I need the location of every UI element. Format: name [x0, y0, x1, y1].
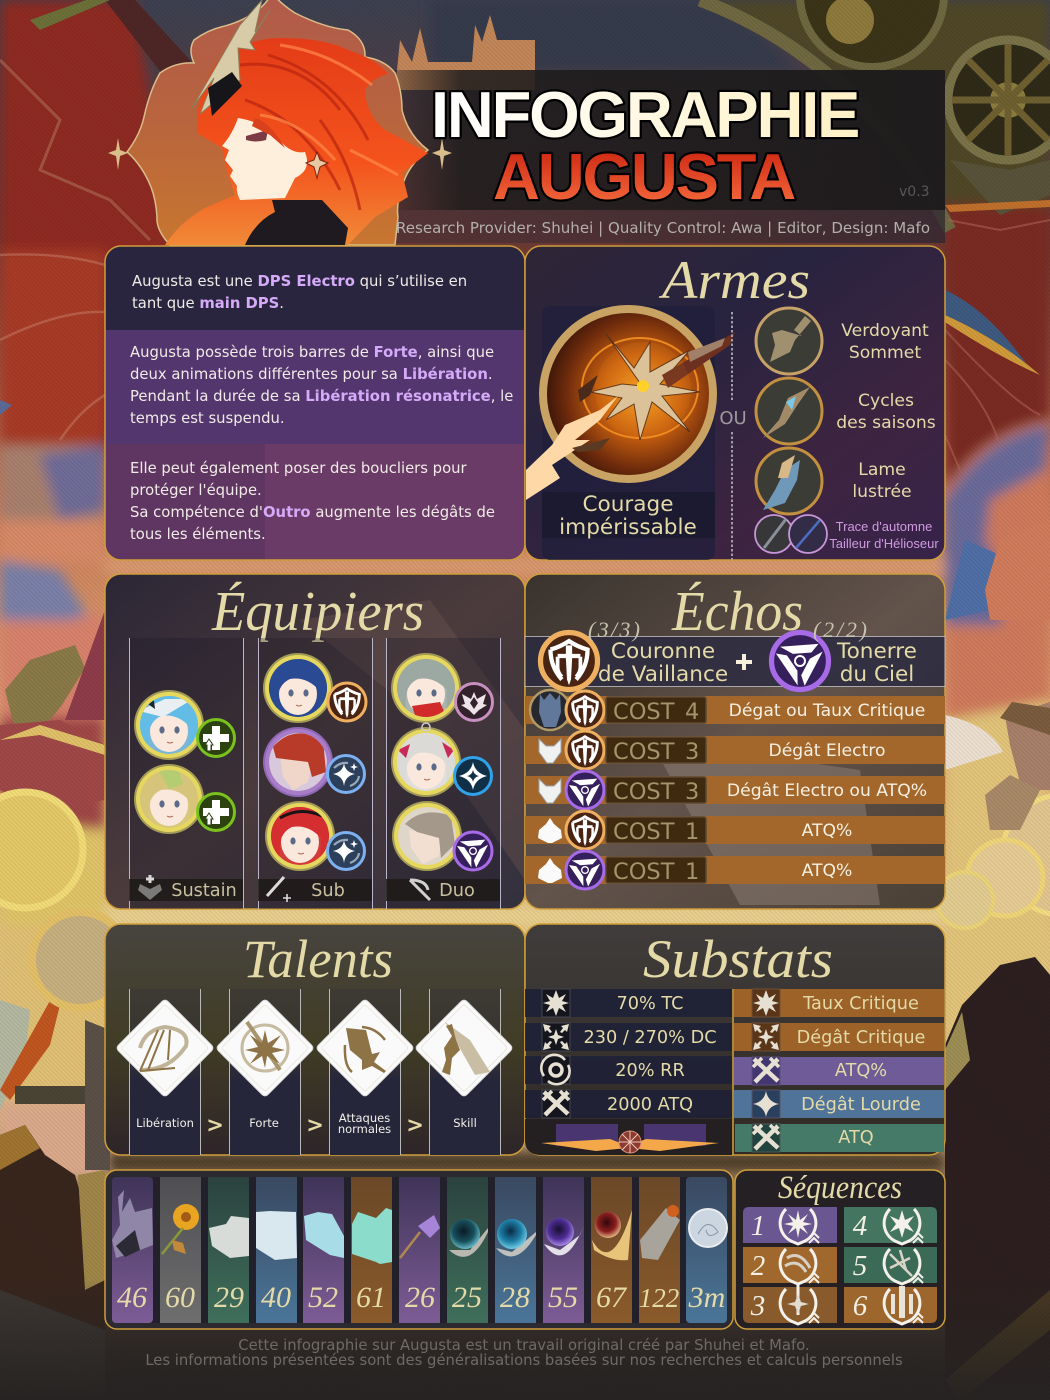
material 61: 61: [356, 1281, 386, 1314]
soldiers and shields: [5, 645, 85, 730]
echo row: cost 1 thunder: 1: [685, 859, 699, 885]
material 60: [160, 1177, 201, 1323]
wash: left column: [0, 0, 175, 460]
avatar: grey hair: [391, 653, 461, 723]
paragraph 1: Augusta est une DPS Electro qui s’utilise en: [132, 273, 467, 290]
column: Sustain: Sustain: [171, 881, 237, 901]
paragraph 2: Augusta possède trois barres de Forte, ainsi que: [130, 344, 494, 361]
avatar: silver hair: [391, 723, 461, 797]
priority: crit rate: [734, 989, 944, 1017]
panel: sequences: [735, 1170, 945, 1329]
priority: heavy damage: Dégât Lourde: [801, 1095, 921, 1115]
set: Tonerre du Ciel: (2/2): [813, 617, 867, 642]
priority: flat attack: [735, 1124, 944, 1152]
echo row: cost 3 electro or atk: [525, 771, 945, 809]
echo row: cost 4: 4: [685, 699, 699, 725]
earring: [306, 152, 328, 178]
target: attack: 2000 ATQ: [607, 1095, 693, 1115]
sparkle right: [432, 138, 452, 170]
material 26: 26: [405, 1281, 435, 1314]
sequence 5: 5: [853, 1250, 867, 1282]
priority arrow: >: [306, 1113, 324, 1137]
heading: Sequences: Séquences: [778, 1170, 902, 1206]
weapon: Lame lustrée: Lame: [858, 460, 906, 480]
panel: substats: [525, 924, 945, 1155]
weapons: alternatives: Trace d'automne: [836, 519, 932, 534]
footer credits: [145, 1337, 903, 1369]
material 3m: [686, 1177, 727, 1323]
label: Duo: [386, 879, 500, 901]
priority arrow: >: [206, 1113, 224, 1137]
weapon: Cycles des saisons: Cycles: [858, 391, 914, 411]
panel: echos: [525, 574, 945, 909]
priority: flat attack: ATQ: [838, 1128, 874, 1148]
wash: right column: [945, 205, 1050, 490]
echo row: cost 4: Dégat ou Taux Critique: [729, 701, 925, 721]
material 28: 28: [500, 1281, 530, 1314]
echo row: cost 3 electro: COST: [613, 739, 675, 765]
material 122: 122: [639, 1283, 679, 1313]
priority arrow: >: [406, 1113, 424, 1137]
sequence 2: 2: [751, 1250, 765, 1282]
heading: Talents: Talents: [243, 929, 393, 989]
material 3m: 3m: [688, 1281, 725, 1314]
panel: talents: [105, 924, 525, 1155]
weapon: Cycles des saisons: [756, 378, 936, 444]
headband: [208, 72, 242, 116]
target: crit damage: 230 / 270% DC: [583, 1028, 717, 1048]
avatar: blonde hair: [134, 764, 204, 834]
version: v0.3: [899, 184, 930, 200]
title AUGUSTA: AUGUSTA: [493, 140, 795, 213]
material 28: [495, 1177, 536, 1323]
panel: description: [105, 246, 525, 560]
material 46: 46: [117, 1281, 147, 1314]
talent columns: [129, 989, 500, 1155]
helmets: [0, 1125, 105, 1330]
set: Couronne de Vaillance: [540, 617, 728, 690]
sequence 4: 4: [853, 1210, 867, 1242]
set: Tonerre du Ciel: du Ciel: [840, 662, 914, 687]
heading: Echos: Échos: [671, 581, 803, 643]
weapons: alternatives: [755, 515, 939, 553]
material 67: [591, 1177, 632, 1323]
echo row: cost 4: COST: [613, 699, 675, 725]
material 29: [208, 1177, 249, 1323]
sparkle left: [108, 138, 128, 170]
column: Duo: [386, 638, 500, 909]
plus: [736, 654, 752, 670]
wing lines and sky: [0, 254, 105, 440]
avatar: navy hair: [263, 653, 333, 723]
echo row: cost 1 crown: [525, 811, 945, 849]
paragraph 2: temps est suspendu.: [130, 410, 285, 427]
material 61: [351, 1177, 392, 1323]
target: attack: [525, 1090, 732, 1118]
decorative energy meter: [525, 1119, 732, 1155]
column: Sub: [258, 638, 372, 909]
avatar: blue hair: [134, 690, 204, 760]
paragraph 3: Sa compétence d'Outro augmente les dégâts de: [130, 504, 495, 521]
echo row: cost 1 crown: COST: [613, 819, 675, 845]
panel: equipiers: [105, 574, 525, 909]
column: Sustain: [129, 638, 244, 909]
heading: Substats: Substats: [643, 929, 833, 989]
material 46: [112, 1177, 153, 1323]
material 60: 60: [165, 1281, 195, 1314]
material 25: 25: [452, 1281, 482, 1314]
sequence 1: 1: [751, 1210, 765, 1242]
title block: [396, 78, 930, 237]
talent: Attaques normales: [316, 999, 414, 1136]
gold head ornament: [192, 0, 270, 114]
sequence 3: 3: [750, 1290, 765, 1322]
separator: ou: OU: [719, 408, 747, 429]
footer credits: Les informations présentées sont des généralisations basées sur nos recherches et calculs personnels: [145, 1352, 903, 1369]
priority: heavy damage: [734, 1090, 944, 1118]
spear and feather at left: [0, 1000, 30, 1110]
echo row: cost 3 electro or atk: COST: [613, 779, 675, 805]
talent: Attaques normales: Attaques: [339, 1111, 390, 1125]
panel: materials: [105, 1170, 733, 1329]
face: [222, 118, 307, 200]
sequence 1: [743, 1207, 837, 1244]
main weapon card: [526, 306, 735, 560]
weapon art: [526, 332, 735, 500]
paragraph 3: Elle peut également poser des boucliers pour: [130, 460, 467, 477]
target: energy regen: [525, 1055, 732, 1084]
talent: Liberation: [116, 999, 214, 1130]
priority: crit rate: Taux Critique: [802, 994, 919, 1014]
label: Sub: [258, 879, 372, 901]
material 67: 67: [596, 1281, 628, 1314]
priority: crit damage: [734, 1023, 944, 1051]
avatar: taupe hair man: [392, 801, 462, 871]
echo row: cost 3 electro: 3: [685, 739, 699, 765]
footer credits: Cette infographie sur Augusta est un travail original créé par Shuhei et Mafo.: [238, 1337, 810, 1354]
material 40: [256, 1177, 297, 1323]
hair: [165, 38, 428, 245]
sequence 5: [844, 1247, 937, 1284]
talent: Forte: [216, 999, 314, 1130]
material 29: 29: [214, 1281, 244, 1314]
title backdrop: [395, 70, 945, 243]
weapons: alternatives: Tailleur d'Hélioseur: [829, 536, 939, 551]
echo row: cost 1 thunder: [525, 851, 945, 889]
sequence 3: [743, 1285, 837, 1324]
talent: Liberation: Libération: [136, 1116, 194, 1130]
paragraph 2: deux animations différentes pour sa Libération.: [130, 366, 493, 383]
paragraph 1: tant que main DPS.: [132, 295, 284, 312]
target: crit rate: [525, 989, 732, 1017]
paragraph 3: tous les éléments.: [130, 526, 266, 543]
heading: Equipiers: Équipiers: [211, 581, 424, 643]
panel: armes: [525, 246, 945, 560]
credits: Research Provider: Shuhei | Quality Control: Awa | Editor, Design: Mafo: [396, 219, 930, 237]
material 40: 40: [261, 1281, 291, 1314]
echo row: cost 3 electro or atk: 3: [685, 779, 699, 805]
avatar: red hair girl: [265, 801, 335, 871]
echo row: cost 1 thunder: ATQ%: [802, 861, 852, 881]
sequence 6: 6: [853, 1290, 868, 1322]
label: Sustain: [129, 879, 243, 901]
paragraph 2: Pendant la durée de sa Libération résonatrice, le: [130, 388, 513, 405]
ornate frame: [127, 0, 428, 245]
title INFOGRAPHIE: INFOGRAPHIE: [431, 78, 858, 151]
talent: Attaques normales: normales: [338, 1122, 391, 1136]
echo row: cost 3 electro: [525, 731, 945, 769]
weapon: Verdoyant Sommet: Verdoyant: [841, 321, 929, 341]
talent: Skill: Skill: [453, 1116, 477, 1130]
set: Tonerre du Ciel: [772, 617, 917, 690]
dark collar: [245, 200, 348, 245]
sets header: [525, 617, 945, 690]
echo row: cost 4: [525, 690, 945, 730]
set: Couronne de Vaillance: Couronne: [611, 639, 715, 664]
material 26: [399, 1177, 440, 1323]
echo row: cost 1 crown: ATQ%: [802, 821, 852, 841]
target: energy regen: 20% RR: [615, 1061, 685, 1081]
set: Tonerre du Ciel: Tonerre: [836, 639, 917, 664]
sequence 6: [844, 1286, 937, 1324]
material 55: [543, 1177, 584, 1323]
main weapon card: impérissable: [559, 515, 697, 540]
column: Duo: Duo: [439, 881, 475, 901]
sequence 2: [743, 1247, 837, 1284]
priority: atk percent: [734, 1057, 944, 1085]
weapon: Lame lustrée: lustrée: [852, 482, 912, 502]
column: Sub: Sub: [311, 881, 345, 901]
weapon: Verdoyant Sommet: Sommet: [849, 343, 921, 363]
avatar: red hair man: [263, 727, 333, 797]
sequence 4: [844, 1207, 937, 1244]
material 52: 52: [308, 1281, 338, 1314]
weapon: Verdoyant Sommet: [756, 308, 929, 374]
set: Couronne de Vaillance: de Vaillance: [598, 662, 728, 687]
echo row: cost 3 electro or atk: Dégât Electro ou ATQ%: [727, 781, 927, 801]
portrait: Augusta in ornate frame: [108, 0, 452, 245]
weapon: Lame lustrée: [756, 448, 912, 514]
priority: atk percent: ATQ%: [835, 1061, 887, 1081]
set: Couronne de Vaillance: (3/3): [588, 617, 640, 642]
weapon: Cycles des saisons: des saisons: [836, 413, 936, 433]
talent: Skill: [415, 999, 513, 1130]
material 52: [303, 1177, 344, 1323]
weapon name: Courage: [582, 492, 674, 517]
echo row: cost 3 electro: Dégât Electro: [768, 741, 886, 761]
material 55: 55: [548, 1281, 578, 1314]
echo row: cost 1 crown: 1: [685, 819, 699, 845]
target: crit damage: [525, 1023, 732, 1051]
divider: [732, 989, 734, 1155]
material 122: [639, 1177, 680, 1323]
target: crit rate: 70% TC: [616, 994, 684, 1014]
echo row: cost 1 thunder: COST: [613, 859, 675, 885]
heading: Armes: Armes: [659, 250, 810, 310]
priority: crit damage: Dégât Critique: [797, 1028, 925, 1048]
material 25: [447, 1177, 488, 1323]
talent: Forte: Forte: [249, 1116, 279, 1130]
paragraph 3: protéger l'équipe.: [130, 482, 262, 499]
